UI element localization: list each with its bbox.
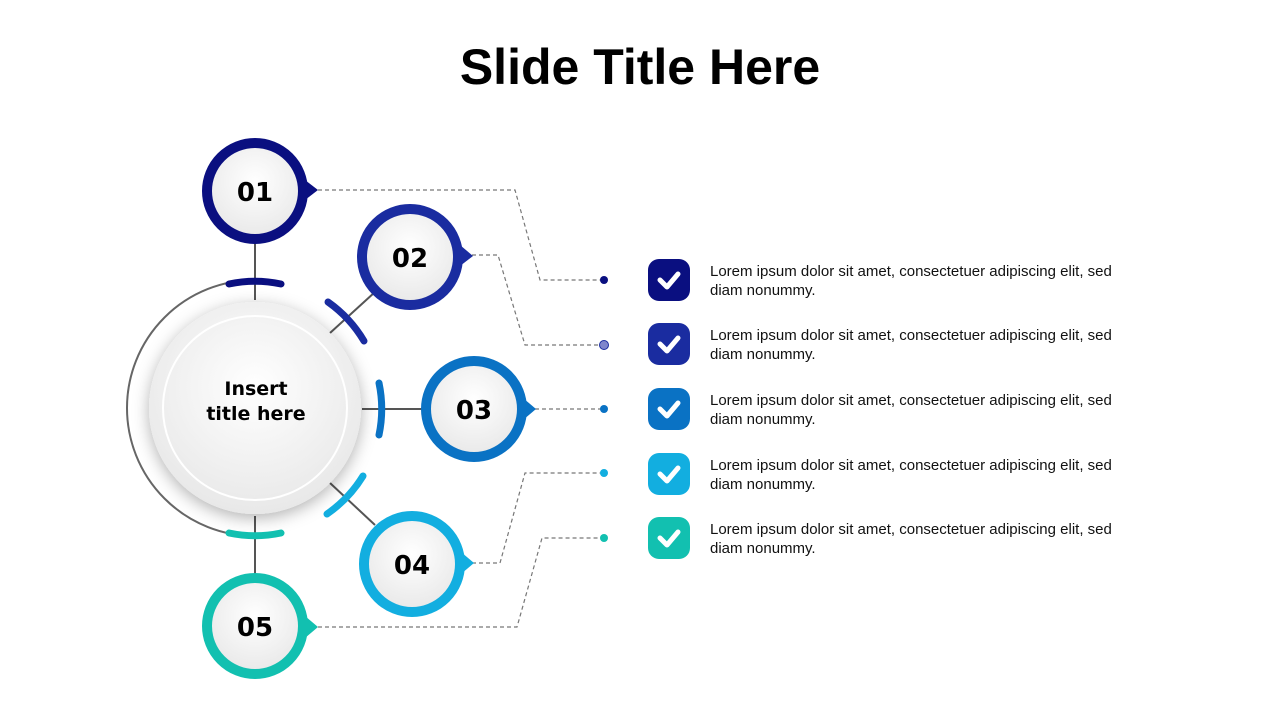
- center circle: [149, 302, 361, 514]
- node 03: [426, 361, 536, 457]
- node 02: 02: [392, 244, 428, 274]
- item 5: Lorem ipsum dolor sit amet, consectetuer adipiscing elit, sed diam nonummy.: [710, 521, 1112, 557]
- center circle: Insert: [224, 378, 288, 400]
- title: Slide Title Here: [460, 39, 820, 95]
- dashed leaders: [318, 190, 604, 627]
- gray arc: [127, 280, 255, 536]
- item 4: Lorem ipsum dolor sit amet, consectetuer adipiscing elit, sed diam nonummy.: [710, 457, 1112, 493]
- node 05: 05: [237, 613, 273, 643]
- node 01: [207, 143, 318, 239]
- node 05: [207, 578, 318, 674]
- node 04: [364, 516, 474, 612]
- connector lines: [255, 240, 422, 575]
- item 1: Lorem ipsum dolor sit amet, consectetuer adipiscing elit, sed diam nonummy.: [710, 263, 1112, 299]
- center circle: title here: [206, 403, 306, 425]
- node 04: 04: [394, 551, 430, 581]
- node 02: [362, 209, 473, 305]
- accent arcs: [229, 281, 382, 536]
- item 3: Lorem ipsum dolor sit amet, consectetuer adipiscing elit, sed diam nonummy.: [710, 392, 1112, 428]
- item 2: Lorem ipsum dolor sit amet, consectetuer adipiscing elit, sed diam nonummy.: [710, 327, 1112, 363]
- node 03: 03: [456, 396, 492, 426]
- dots: [600, 276, 608, 284]
- node 01: 01: [237, 178, 273, 208]
